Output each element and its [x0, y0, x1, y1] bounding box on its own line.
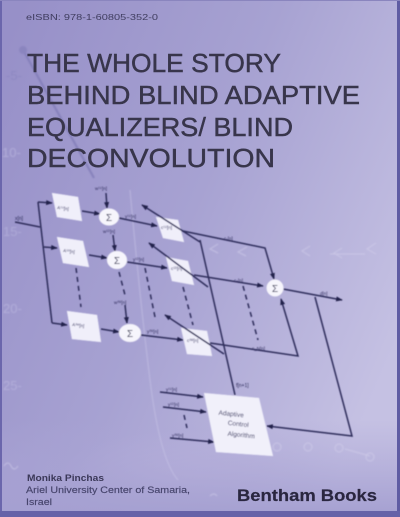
signal lines [15, 193, 352, 442]
diagram labels: A⁽¹⁾[n] [57, 205, 69, 211]
block diagram [15, 186, 352, 456]
adaptive control label [218, 410, 255, 440]
author block: Israel [26, 497, 52, 507]
diagram labels: x[n] [15, 216, 24, 222]
sigma symbols [106, 213, 278, 340]
sigma symbols: Σ [106, 213, 112, 224]
equalizer boxes [156, 217, 212, 356]
diagram labels: f[n+1] [236, 383, 249, 389]
title: BEHIND BLIND ADAPTIVE [27, 80, 360, 110]
author block [26, 473, 190, 507]
faint background chart: 25- [3, 378, 22, 393]
adaptive control box [204, 393, 273, 456]
publisher: Bentham Books [237, 486, 377, 505]
faint background chart: -5- [6, 68, 22, 83]
dashed connectors [76, 268, 258, 428]
diagram labels: c_N[n] [252, 346, 265, 351]
ISBN line: eISBN: 978-1-60805-352-0 [26, 13, 159, 22]
diagram labels [15, 186, 328, 438]
title: DECONVOLUTION [27, 143, 275, 173]
adaptive control label: Algorithm [227, 431, 255, 440]
faint background chart: 15- [3, 224, 22, 239]
title: THE WHOLE STORY [27, 48, 281, 78]
summing junctions [99, 208, 284, 342]
diagram labels: A⁽²⁾[n] [63, 248, 75, 254]
author block: Ariel University Center of Samaria, [26, 485, 190, 495]
filter boxes [52, 193, 101, 342]
feedback arrows [142, 205, 224, 354]
diagram labels: d[n] [320, 291, 328, 296]
diagram labels: y⁽²⁾[n] [133, 257, 144, 262]
adaptive control label: Adaptive [218, 410, 244, 419]
diagram labels: c⁽ᴺ⁾[n] [187, 338, 198, 343]
faint background chart: 20- [3, 301, 22, 316]
diagram labels: y⁽¹⁾[n] [166, 387, 177, 392]
diagram labels: w⁽¹⁾[n] [95, 186, 107, 191]
sigma symbols: Σ [114, 256, 120, 267]
diagram labels: y⁽ᴺ⁾[n] [172, 433, 183, 438]
diagram labels: w⁽ᴺ⁾[n] [114, 300, 126, 305]
sigma symbols: Σ [127, 329, 133, 340]
diagram labels: y⁽ᴺ⁾[n] [147, 329, 158, 334]
diagram labels: w⁽²⁾[n] [103, 229, 115, 234]
diagram labels: A⁽ᴺ⁾[n] [72, 322, 85, 328]
diagram labels: c⁽²⁾[n] [171, 266, 182, 271]
diagram labels: y⁽²⁾[n] [168, 402, 179, 407]
diagram labels: c₂[n] [234, 278, 243, 283]
diagram labels: c⁽¹⁾[n] [161, 225, 172, 230]
adaptive control label: Control [227, 420, 249, 429]
diagram labels: c₁[n] [224, 236, 233, 241]
title [27, 48, 360, 173]
author block: Monika Pinchas [27, 473, 104, 483]
sigma symbols: Σ [272, 284, 278, 295]
diagram labels: y⁽¹⁾[n] [125, 214, 136, 219]
faint background chart: 10- [2, 145, 21, 160]
title: EQUALIZERS/ BLIND [27, 112, 293, 142]
